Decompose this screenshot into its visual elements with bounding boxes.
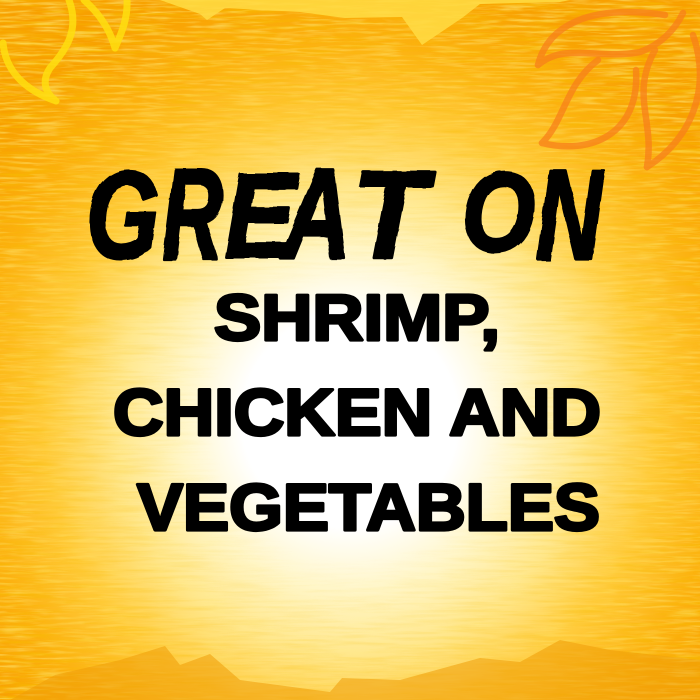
text: VEGETABLES: VEGETABLES [137,470,600,544]
heading: GREAT ON [86,143,605,288]
heading: GREAT ON: G [86,146,159,285]
heading: GREAT ON: T [352,147,435,285]
torn paper accent: top [160,0,570,45]
heading: GREAT ON: E [224,150,299,283]
heading: GREAT ON: R [162,143,223,288]
heading: GREAT ON: A [279,143,351,285]
text: CHICKEN AND: CHICKEN AND [113,375,601,449]
mountain wash: bottom [10,640,700,700]
icon: orange leaves top right [538,12,700,167]
icon: yellow leaves top left [3,0,127,101]
heading: GREAT ON: N [536,143,605,287]
text: SHRIMP,: SHRIMP, [214,281,500,354]
heading: GREAT ON: O [462,149,535,275]
